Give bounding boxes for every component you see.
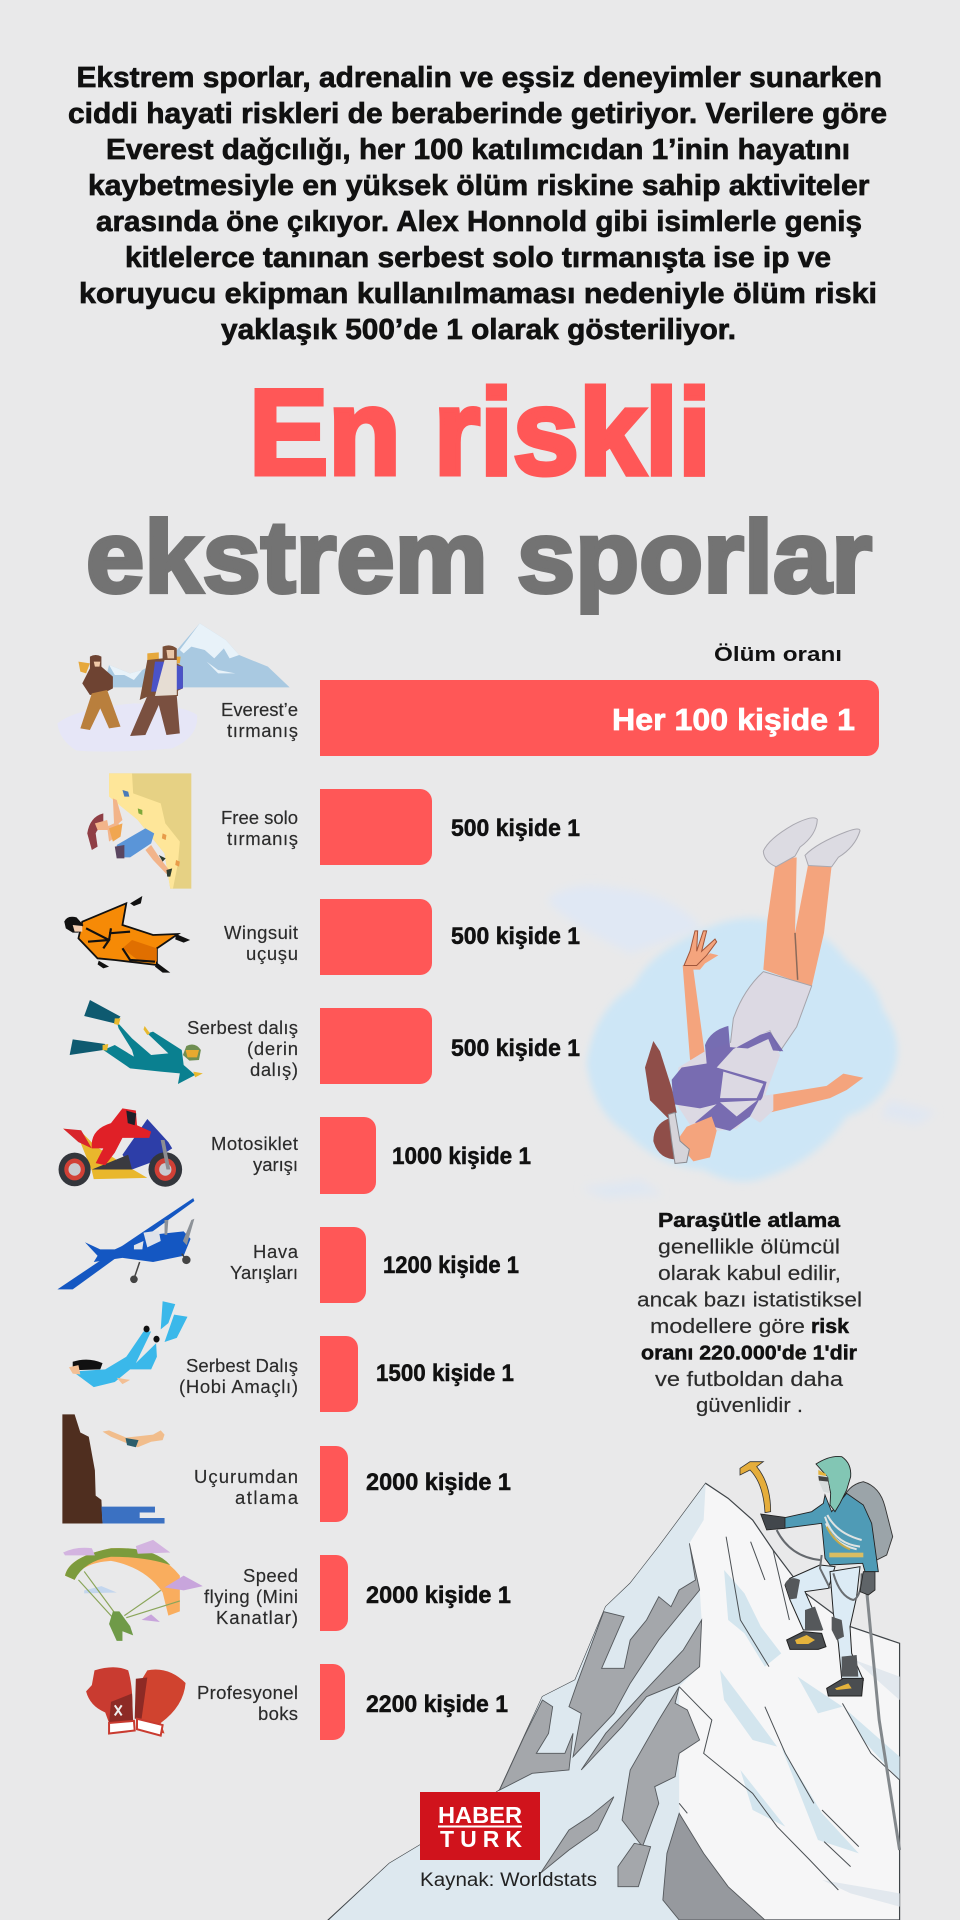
row: boxing bbox=[197, 1664, 508, 1740]
logo: Haberturk bbox=[420, 1792, 540, 1860]
title bbox=[86, 364, 872, 614]
row: speed flying bbox=[204, 1555, 511, 1631]
text block: skydiving note: ve futboldan daha bbox=[655, 1369, 844, 1391]
belt bbox=[829, 1553, 863, 1557]
illustrations lower rows bbox=[57, 1108, 203, 1736]
jacket and arm bbox=[782, 1493, 878, 1572]
icon: paraglider bbox=[63, 1540, 203, 1641]
intro paragraph: yaklaşık 500’de 1 olarak gösteriliyor. bbox=[221, 314, 736, 346]
row: motorcycle: 1000 kişide 1 bbox=[392, 1143, 531, 1170]
row: wingsuit: 500 kişide 1 bbox=[451, 923, 580, 950]
icon: Everest climbers bbox=[57, 623, 290, 752]
intro paragraph bbox=[68, 62, 887, 346]
illustration: climber bbox=[740, 1456, 893, 1696]
row: air racing: 1200 kişide 1 bbox=[383, 1252, 519, 1279]
intro paragraph: arasında öne çıkıyor. Alex Honnold gibi isimlerle geniş bbox=[96, 206, 862, 238]
right arm bbox=[763, 1074, 863, 1112]
text block: skydiving note: güvenlidir . bbox=[696, 1395, 803, 1417]
knee pads bbox=[785, 1578, 858, 1677]
hood bbox=[816, 1456, 851, 1512]
logo: Haberturk: TURK bbox=[440, 1826, 522, 1852]
left climber bbox=[78, 655, 121, 730]
title: En riskli bbox=[249, 364, 711, 500]
row: boxing: 2200 kişide 1 bbox=[366, 1691, 508, 1718]
illustration: mountain bbox=[328, 1483, 900, 1920]
intro paragraph: kitlelerce tanınan serbest solo tırmanışta ise ip ve bbox=[125, 242, 831, 274]
row: free diving hobby: (Hobi Amaçlı) bbox=[179, 1376, 298, 1397]
text block: skydiving note: oranı 220.000'de 1'dir bbox=[641, 1342, 857, 1364]
hair bbox=[645, 1041, 677, 1119]
text block: skydiving note bbox=[637, 1210, 862, 1417]
row: air racing bbox=[230, 1227, 519, 1303]
ice axe bbox=[740, 1462, 771, 1513]
text block: skydiving note: risk bbox=[811, 1316, 850, 1338]
carabiners bbox=[820, 1555, 862, 1600]
row: Everest bbox=[221, 680, 879, 756]
row: speed flying: Kanatlar) bbox=[216, 1607, 298, 1628]
trousers bbox=[785, 1565, 835, 1630]
row: cliff diving: Uçurumdan bbox=[194, 1466, 298, 1487]
row: free solo: tırmanış bbox=[227, 828, 298, 849]
icon: wingsuit flyer bbox=[64, 896, 190, 973]
row: free diving deep bbox=[187, 1008, 580, 1084]
legs bbox=[763, 857, 798, 982]
row: free diving hobby bbox=[179, 1336, 514, 1412]
backpack bbox=[842, 1482, 893, 1560]
right climber bbox=[130, 645, 183, 736]
head and goggles bbox=[677, 1117, 717, 1161]
row: free diving hobby: 1500 kişide 1 bbox=[376, 1360, 514, 1387]
row: free solo: 500 kişide 1 bbox=[451, 815, 580, 842]
row: motorcycle: yarışı bbox=[253, 1154, 298, 1175]
intro paragraph: ciddi hayati riskleri de beraberinde getiriyor. Verilere göre bbox=[68, 98, 887, 130]
logo: Haberturk: HABER bbox=[438, 1802, 522, 1828]
row: boxing: boks bbox=[258, 1703, 298, 1724]
row: motorcycle bbox=[211, 1117, 531, 1194]
icon: motorcycle racer bbox=[59, 1108, 182, 1187]
bar chart bbox=[179, 643, 879, 1740]
boots bbox=[787, 1632, 826, 1649]
row: motorcycle: Motosiklet bbox=[211, 1133, 298, 1154]
intro paragraph: kaybetmesiyle en yüksek ölüm riskine sahip aktiviteler bbox=[88, 170, 870, 202]
gloves bbox=[761, 1514, 785, 1530]
icon: free solo rock climber bbox=[87, 773, 191, 889]
row: speed flying: flying (Mini bbox=[204, 1586, 298, 1607]
row: Everest: Her 100 kişide 1 bbox=[612, 702, 855, 737]
text block: skydiving note: modellere göre bbox=[650, 1316, 805, 1338]
icon: airplane bbox=[57, 1198, 194, 1289]
column heading: Ölüm oranı bbox=[714, 643, 842, 666]
row: free diving hobby: Serbest Dalış bbox=[186, 1355, 298, 1376]
row: wingsuit: Wingsuit bbox=[224, 922, 298, 943]
intro paragraph: Ekstrem sporlar, adrenalin ve eşsiz deneyimler sunarken bbox=[76, 62, 882, 94]
row: air racing: Hava bbox=[253, 1241, 299, 1262]
row: free diving deep: dalış) bbox=[250, 1059, 298, 1080]
row: free diving deep: (derin bbox=[247, 1038, 298, 1059]
icon: hobby diver bbox=[69, 1301, 187, 1387]
harness bbox=[672, 1026, 783, 1131]
text block: skydiving note: olarak kabul edilir, bbox=[658, 1263, 841, 1285]
intro paragraph: Everest dağcılığı, her 100 katılımcıdan 1’inin hayatını bbox=[106, 134, 850, 166]
title: ekstrem sporlar bbox=[86, 500, 872, 614]
row: cliff diving: atlama bbox=[235, 1487, 299, 1508]
mountain body bbox=[328, 1483, 900, 1920]
source line: Kaynak: Worldstats bbox=[420, 1870, 597, 1891]
row: air racing: Yarışları bbox=[230, 1262, 298, 1283]
row: speed flying: Speed bbox=[243, 1565, 298, 1586]
shorts and body bbox=[730, 972, 812, 1051]
icon: deep free diver bbox=[70, 1000, 203, 1084]
text block: skydiving note: genellikle ölümcül bbox=[658, 1236, 840, 1258]
rock faces bbox=[569, 1543, 700, 1757]
text block: skydiving note: ancak bazı istatistiksel bbox=[637, 1290, 862, 1312]
coiled ropes bbox=[825, 1515, 862, 1549]
icon: cliff diver bbox=[62, 1414, 165, 1523]
left arm raised bbox=[683, 953, 718, 1072]
row: free solo bbox=[221, 789, 580, 865]
illustrations upper rows bbox=[57, 623, 290, 1084]
illustration: falling skydiver in cloud bbox=[547, 818, 937, 1198]
text block: skydiving note: Paraşütle atlama bbox=[658, 1210, 841, 1232]
row: speed flying: 2000 kişide 1 bbox=[366, 1582, 511, 1609]
row: Everest: tırmanış bbox=[227, 720, 298, 741]
row: free diving deep: Serbest dalış bbox=[187, 1017, 298, 1038]
face and goggles bbox=[818, 1468, 830, 1493]
row: free diving deep: 500 kişide 1 bbox=[451, 1035, 580, 1062]
row: Everest: Everest’e bbox=[221, 699, 298, 720]
cloud bbox=[547, 886, 937, 1198]
row: wingsuit bbox=[224, 899, 580, 975]
icon: boxing gloves bbox=[86, 1667, 186, 1736]
shoes bbox=[763, 818, 817, 867]
row: free solo: Free solo bbox=[221, 807, 298, 828]
intro paragraph: koruyucu ekipman kullanılmaması nedeniyle ölüm riski bbox=[79, 278, 877, 310]
rope bbox=[777, 1530, 820, 1560]
row: cliff diving: 2000 kişide 1 bbox=[366, 1469, 511, 1496]
row: boxing: Profesyonel bbox=[197, 1682, 298, 1703]
row: cliff diving bbox=[194, 1446, 511, 1522]
row: wingsuit: uçuşu bbox=[246, 943, 298, 964]
